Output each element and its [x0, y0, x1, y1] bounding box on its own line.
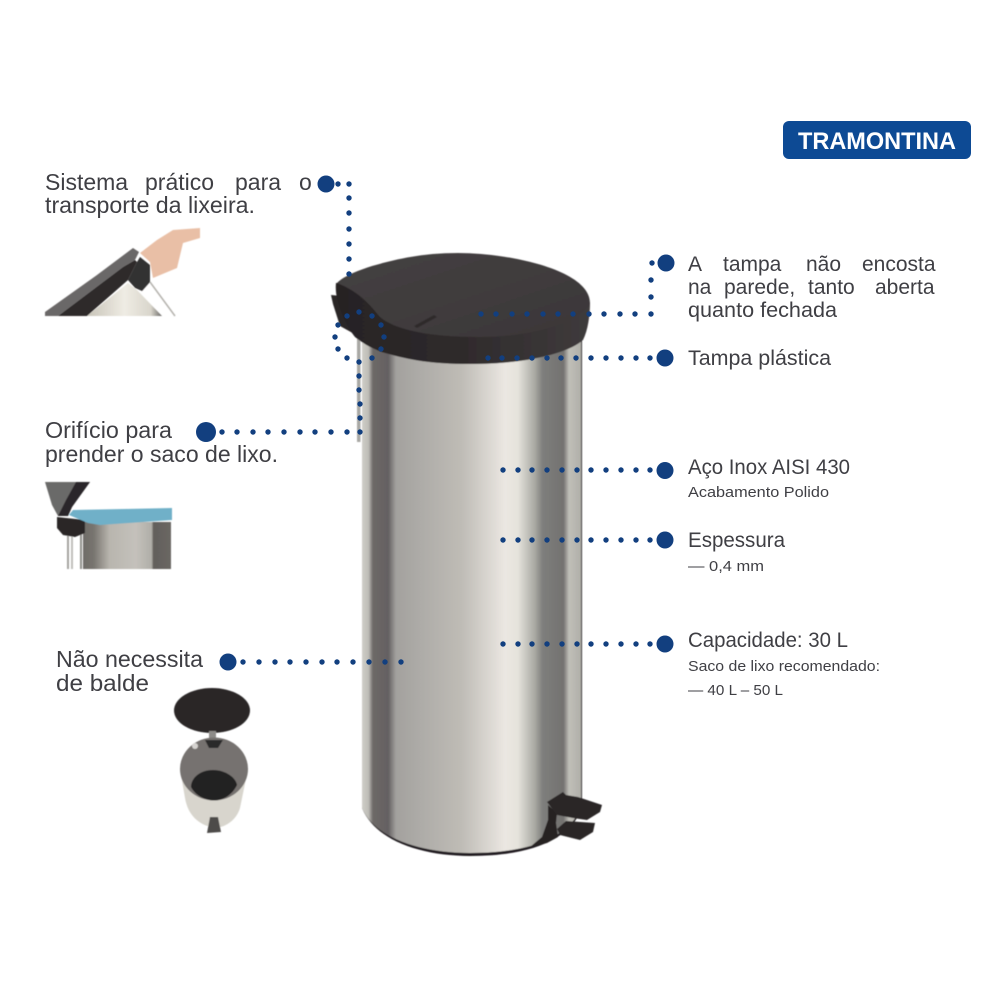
connector dots: [485, 350, 674, 366]
connector dots: [478, 254, 674, 317]
callout text line 2: transporte da lixeira.: [45, 192, 255, 218]
photo: open bin from above: [174, 688, 250, 833]
photo: bag held on the rim: [45, 482, 172, 569]
pedal bracket: [530, 805, 558, 847]
callout heading: Aço Inox AISI 430: [688, 456, 850, 479]
rear rod: [357, 332, 360, 442]
steel surface: [362, 330, 581, 853]
callout text: Não necessita: [56, 646, 203, 672]
photo: hand lifting the bin: [45, 228, 200, 316]
main product: stainless steel bin: [331, 253, 602, 856]
callout heading: Espessura: [688, 529, 785, 552]
callout text line 2: na: [688, 276, 712, 299]
callout: no inner bucket: [56, 646, 404, 833]
callout detail: Saco de lixo recomendado:: [688, 658, 880, 675]
pedal lower step: [557, 821, 595, 840]
connector dots: [500, 532, 674, 548]
callout text line 2: aberta: [875, 276, 935, 299]
callout text: não: [806, 253, 841, 276]
callout detail: Acabamento Polido: [688, 484, 829, 501]
lid grip mark: [414, 315, 437, 328]
callout: capacity: [500, 629, 880, 699]
callout: bag hole: [45, 309, 387, 569]
callout detail line 2: — 40 L – 50 L: [688, 682, 783, 699]
callout detail: — 0,4 mm: [688, 558, 764, 575]
callout text: prático: [145, 169, 214, 195]
brand logo: Tramontina: TRAMONTINA: [798, 128, 956, 155]
callout text: Orifício para: [45, 417, 172, 443]
callout text line 2: parede,: [724, 276, 795, 299]
callout text: Tampa plástica: [688, 347, 831, 370]
connector dots: [196, 309, 387, 442]
callout: plastic lid: [485, 347, 831, 370]
bin base edge: [362, 330, 582, 856]
callout text line 2: de balde: [56, 670, 149, 696]
pedal upper step: [547, 792, 602, 820]
callout heading: Capacidade: 30 L: [688, 629, 848, 652]
lid top surface: [337, 253, 590, 337]
lid rim: [336, 280, 590, 364]
callout: stainless steel: [500, 456, 850, 501]
callout: transport system: [45, 169, 352, 316]
callout text: Sistema: [45, 169, 128, 195]
connector dots: [500, 462, 674, 479]
callout text: para: [235, 169, 281, 195]
callout text: encosta: [862, 253, 936, 276]
callout text line 2: tanto: [808, 276, 855, 299]
brand logo: Tramontina: [783, 121, 971, 159]
callout text: o: [299, 169, 312, 195]
callout text line 3: quanto fechada: [688, 299, 837, 322]
rear handle: [331, 295, 358, 336]
connector dots: [500, 636, 674, 652]
callout text line 2: prender o saco de lixo.: [45, 441, 278, 467]
callout: lid does not touch wall: [478, 253, 936, 322]
callout: thickness: [500, 529, 785, 575]
callout text: tampa: [723, 253, 782, 276]
connector dots: [318, 176, 352, 277]
connector dots: [220, 654, 404, 670]
callout text: A: [688, 253, 702, 276]
